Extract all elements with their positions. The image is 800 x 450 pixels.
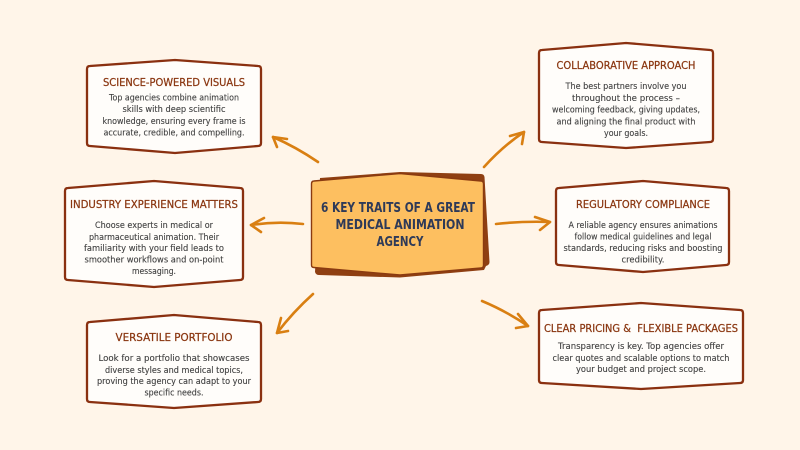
panel: collaborative approach: your goals. [604,129,648,139]
panel: industry experience matters: Choose experts in medical or [95,221,213,231]
arrow: to clear pricing [482,301,528,328]
panel: regulatory compliance: A reliable agency ensures animations [568,221,718,231]
panel: science-powered visuals: knowledge, ensuring every frame is [102,117,246,127]
panel: collaborative approach: and aligning the final product with [556,118,696,128]
panel: science-powered visuals: Top agencies combine animation [108,94,239,104]
panel: regulatory compliance: REGULATORY COMPLIANCE [576,199,710,211]
arrow: to industry experience matters [251,218,303,232]
panel: regulatory compliance: follow medical guidelines and legal [574,232,712,242]
panel: versatile portfolio: specific needs. [144,388,204,398]
panel: collaborative approach: COLLABORATIVE APPROACH [556,60,696,72]
panel: versatile portfolio [87,315,261,408]
panel: versatile portfolio: diverse styles and medical topics, [105,366,243,376]
panel: clear pricing and flexible packages [539,303,743,389]
panel: collaborative approach: throughout the process – [572,94,680,104]
panel: science-powered visuals: SCIENCE-POWERED VISUALS [103,77,245,89]
panel: regulatory compliance: credibility. [622,256,664,266]
panel: clear pricing and flexible packages: CLEAR PRICING & FLEXIBLE PACKAGES [544,323,738,335]
arrow: to versatile portfolio [277,294,313,333]
arrow: to science-powered visuals [273,137,318,162]
panel: collaborative approach: The best partners involve you [565,82,686,92]
panel: science-powered visuals [87,60,261,153]
panel: versatile portfolio: VERSATILE PORTFOLIO [116,332,232,344]
panel: industry experience matters [65,181,243,287]
panel: clear pricing and flexible packages: Transparency is key. Top agencies offer [557,342,724,352]
panel: regulatory compliance [556,181,729,272]
central panel back layer [315,172,490,278]
central panel front layer [312,174,484,275]
panel: science-powered visuals: skills with deep scientific [122,105,226,115]
panel: industry experience matters: pharmaceutical animation. Their [89,233,219,243]
arrow: to collaborative approach [484,132,524,167]
title text [321,201,475,250]
panel: collaborative approach [539,43,713,148]
panel: industry experience matters: messaging. [132,267,176,277]
panel: central title [312,172,490,278]
panel: science-powered visuals: accurate, credible, and compelling. [104,128,244,138]
title text: AGENCY [376,235,424,250]
panel: industry experience matters: familiarity with your field leads to [84,244,224,254]
panel: clear pricing and flexible packages: your budget and project scope. [576,365,706,375]
arrow: to regulatory compliance [496,217,550,230]
panel: versatile portfolio: proving the agency can adapt to your [97,377,251,387]
panel: collaborative approach: welcoming feedback, giving updates, [552,106,700,116]
panel: clear pricing and flexible packages: clear quotes and scalable options to match [552,354,730,364]
title text: MEDICAL ANIMATION [336,218,464,233]
panel: industry experience matters: INDUSTRY EXPERIENCE MATTERS [70,199,238,211]
panel: versatile portfolio: Look for a portfolio that showcases [98,354,250,364]
panel: regulatory compliance: standards, reducing risks and boosting [564,244,722,254]
panel: industry experience matters: smoother workflows and on-point [84,256,224,266]
title text: 6 KEY TRAITS OF A GREAT [321,201,475,216]
